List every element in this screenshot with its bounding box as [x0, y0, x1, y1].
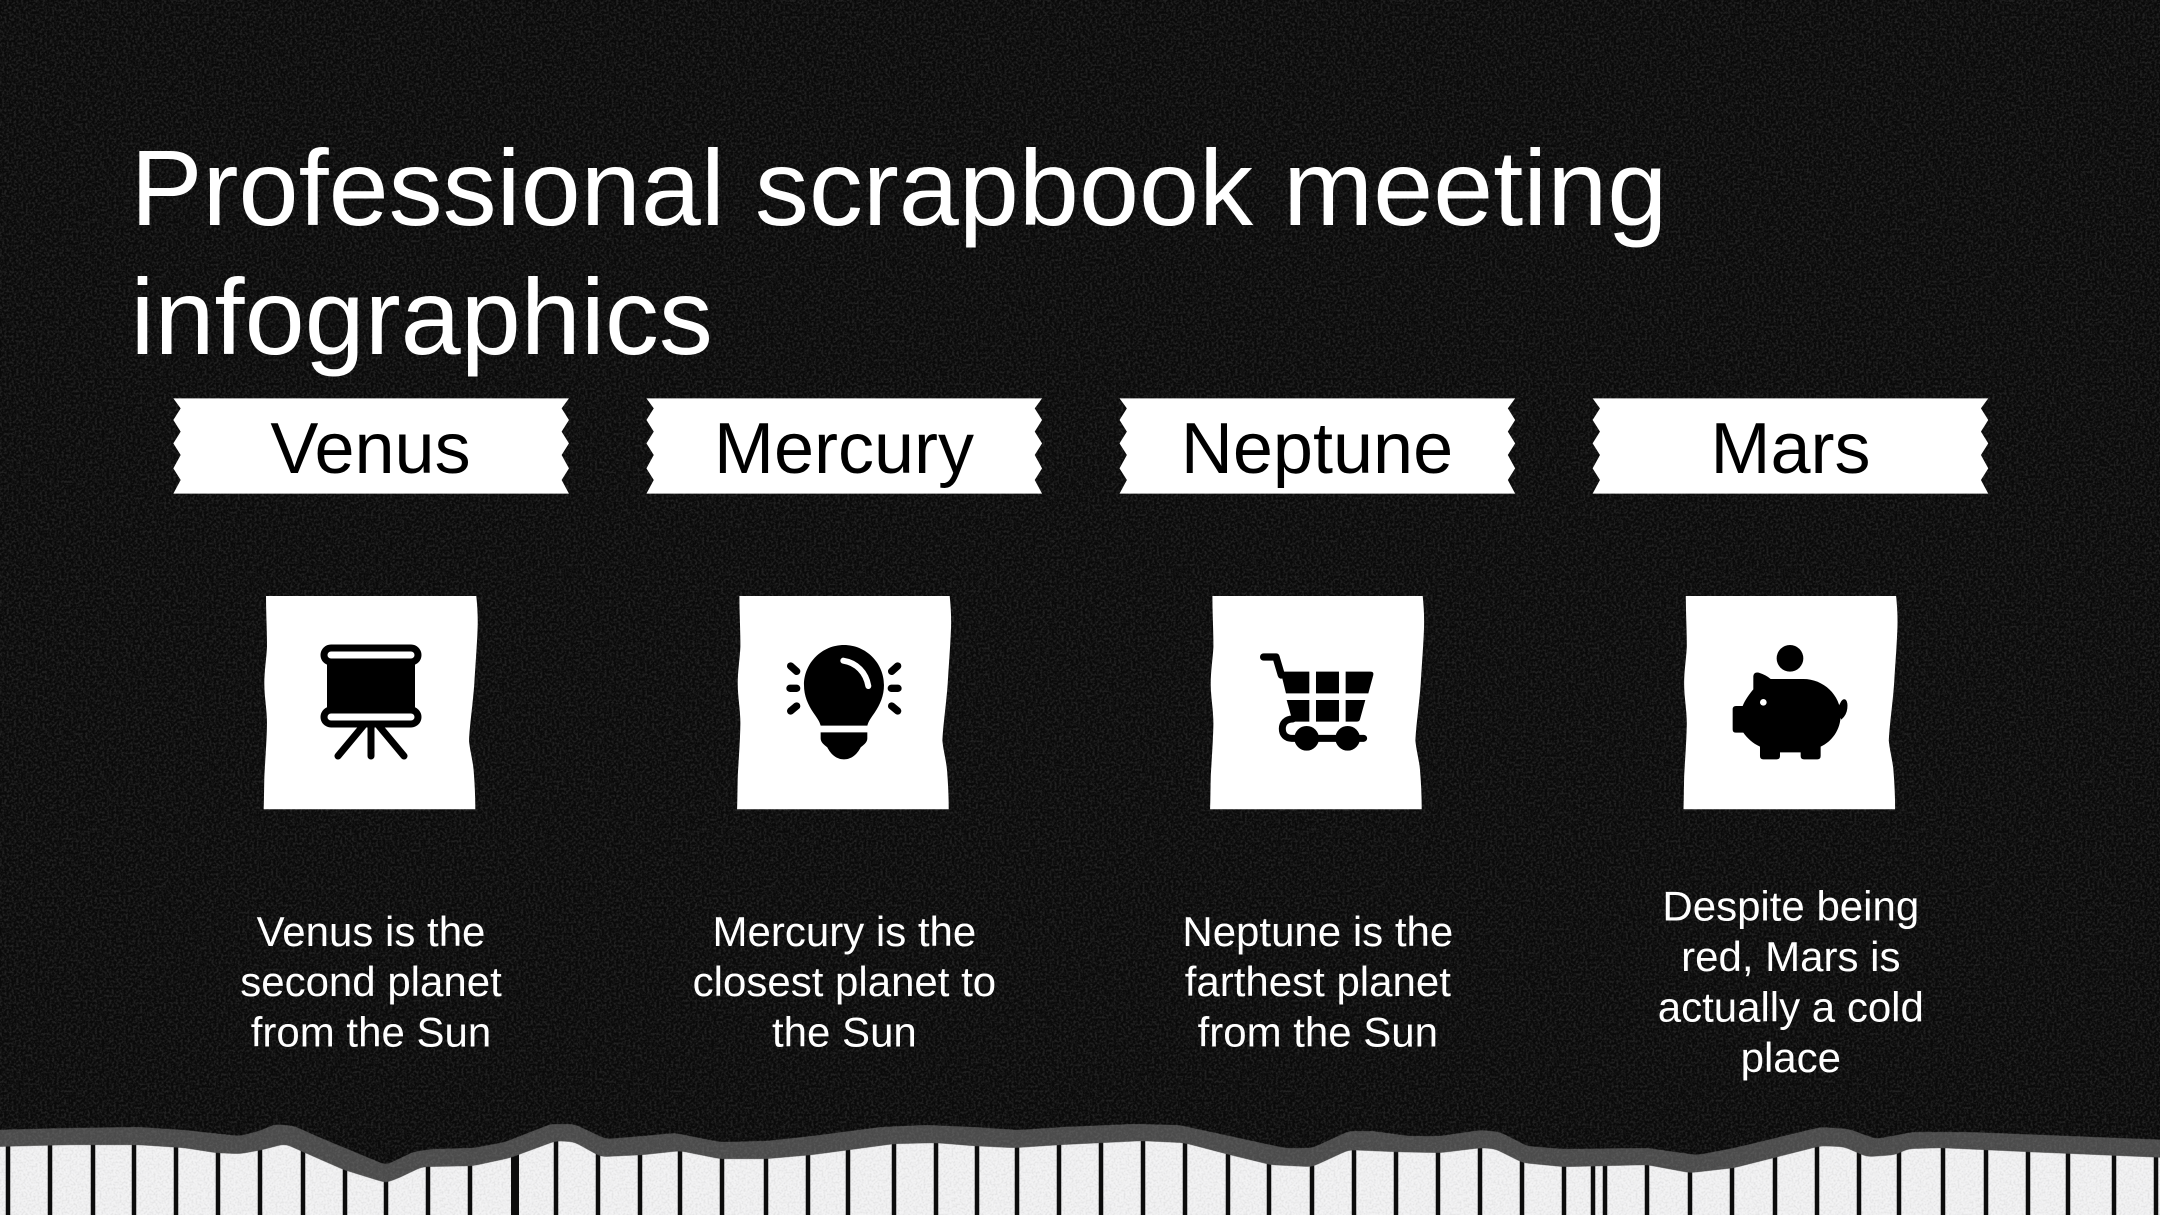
tape label: Mercury: Mercury: [714, 409, 974, 489]
column: Mars: [1593, 398, 1988, 1081]
tape label: Venus: Venus: [270, 409, 471, 489]
title: [130, 127, 1667, 377]
description: Mercury: closest planet to: [693, 958, 996, 1005]
tape label: Mars: [1593, 398, 1988, 494]
icon: shopping cart: [1264, 657, 1373, 751]
description: Mercury: [693, 908, 996, 1056]
description: Neptune: Neptune is the: [1182, 908, 1453, 955]
torn edge band: [0, 1124, 2160, 1182]
icon card: piggy bank: [1683, 596, 1898, 809]
description: Venus: Venus is the: [257, 908, 485, 955]
title: Professional scrapbook meeting: [130, 127, 1667, 248]
tape label: Mars: Mars: [1710, 409, 1870, 489]
tape label: Neptune: Neptune: [1181, 409, 1453, 489]
description: Mercury: Mercury is the: [713, 908, 976, 955]
title: infographics: [130, 256, 713, 377]
icon card: light bulb: [737, 596, 951, 809]
description: Mars: Despite being: [1662, 882, 1919, 930]
description: Mars: red, Mars is: [1681, 933, 1900, 980]
torn notebook paper strip: [0, 1115, 2160, 1215]
description: Mars: actually a cold: [1658, 984, 1924, 1030]
description: Mars: place: [1741, 1034, 1841, 1081]
icon: piggy bank: [1733, 645, 1847, 759]
column: Neptune: [1120, 398, 1515, 1055]
description: Neptune: [1182, 908, 1453, 1056]
tape label: Venus: [173, 398, 569, 494]
description: Venus: from the Sun: [251, 1008, 491, 1056]
description: Venus: second planet: [240, 958, 502, 1005]
tape label: Mercury: [646, 398, 1042, 494]
icon: projector: [324, 648, 418, 756]
column: Mercury: [646, 398, 1042, 1055]
description: Mars: [1658, 882, 1924, 1081]
description: Neptune: from the Sun: [1198, 1008, 1438, 1056]
description: Mercury: the Sun: [772, 1008, 917, 1056]
icon card: projector screen: [264, 596, 478, 809]
column: Venus: [173, 398, 569, 1055]
description: Neptune: farthest planet: [1185, 958, 1451, 1005]
tape label: Neptune: [1120, 398, 1515, 494]
icon card: shopping cart: [1210, 596, 1424, 809]
description: Venus: [240, 908, 502, 1056]
icon: light bulb: [790, 645, 898, 759]
